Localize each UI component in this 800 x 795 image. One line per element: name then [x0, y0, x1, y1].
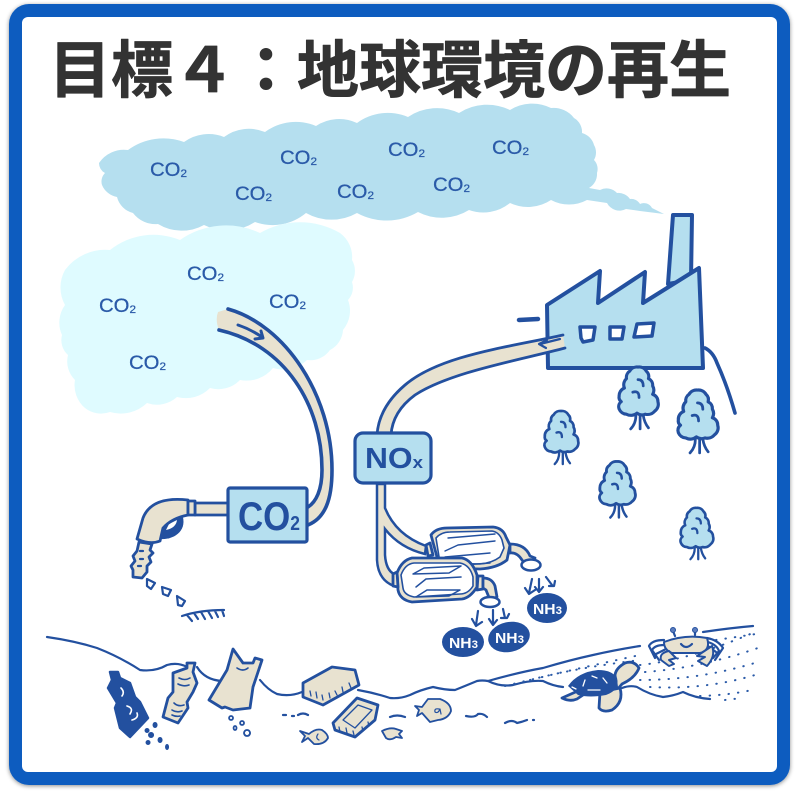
fiddler crab — [649, 628, 723, 666]
CO2 label: 2 — [310, 156, 317, 168]
beige plastic bottle — [163, 663, 197, 723]
CO2 label: 2 — [522, 146, 529, 158]
NOx label: NOx — [365, 443, 424, 475]
pipes to converters — [377, 484, 426, 586]
CO2 label: CO — [129, 353, 158, 374]
tree — [600, 461, 635, 518]
fish — [382, 728, 402, 739]
foam tray — [333, 698, 378, 737]
CO2 label: CO — [150, 160, 178, 181]
CO2 box label: CO — [238, 495, 298, 539]
hill line — [705, 348, 735, 413]
CO2 label: 2 — [418, 148, 425, 160]
water ripples — [283, 714, 534, 723]
NH3 label: NH3 — [449, 635, 478, 652]
CO2 box label: 2 — [290, 513, 300, 535]
CO2 label: 2 — [180, 168, 187, 180]
NOx pipe — [377, 335, 565, 435]
tree — [678, 390, 718, 453]
CO2 label: CO — [187, 264, 216, 285]
tree — [619, 367, 658, 429]
outlet pipe — [510, 544, 535, 566]
factory chimney and building — [519, 215, 735, 413]
crab claws — [661, 646, 713, 666]
NH3 label: NH3 — [495, 630, 524, 647]
CO2 label: CO — [492, 138, 520, 159]
CO2 label: CO — [235, 184, 264, 205]
NH3 arrows — [472, 577, 555, 626]
NH3 molecule — [527, 593, 567, 623]
icon: flow arrow — [238, 325, 263, 339]
CO2 label: 2 — [367, 190, 374, 202]
crab eyes — [673, 631, 695, 636]
CO2 label: 2 — [299, 300, 306, 312]
back catalytic converter — [426, 527, 540, 570]
icon: ground hatching — [182, 610, 224, 621]
front catalytic converter — [393, 558, 500, 607]
nozzle and hose — [131, 499, 228, 621]
microplastic fragments — [229, 716, 250, 736]
NH3 molecule — [442, 627, 484, 657]
CO2 label: 2 — [217, 272, 224, 284]
fish — [415, 699, 451, 722]
CO2 label: 2 — [129, 304, 136, 316]
outlet pipe — [483, 578, 497, 600]
tree — [680, 508, 713, 559]
CO2 label: CO — [337, 182, 366, 203]
icon: flow arrow — [539, 339, 560, 348]
shoreline — [47, 637, 710, 699]
NH3 molecule — [485, 618, 533, 656]
NH3 label: NH3 — [533, 601, 562, 618]
plastic bag — [209, 649, 262, 736]
CO2 label: CO — [280, 148, 308, 169]
beach sand dots — [505, 632, 758, 700]
icon: falling drops — [147, 579, 185, 606]
title: 目標４：地球環境の再生 — [49, 20, 731, 110]
upper CO2 cloud with factory smoke — [99, 104, 664, 231]
CO2 label: 2 — [463, 183, 470, 195]
sea turtle — [562, 662, 639, 711]
microplastic dots — [145, 722, 169, 750]
CO2 label: CO — [433, 175, 462, 196]
NOx box — [355, 433, 431, 483]
CO2 label: CO — [388, 140, 416, 161]
tree — [544, 411, 578, 464]
CO2 capture pipe — [217, 309, 332, 525]
dash mark — [519, 319, 538, 320]
fish — [300, 730, 328, 744]
CO2 label: CO — [269, 292, 298, 313]
CO2 label: 2 — [159, 361, 166, 373]
CO2 label: 2 — [265, 192, 272, 204]
beach edge — [488, 626, 753, 681]
CO2 storage box — [228, 488, 307, 542]
CO2 label: CO — [99, 296, 128, 317]
factory windows — [580, 323, 654, 342]
lower pale CO2 cloud — [59, 222, 355, 414]
dark plastic bottle — [108, 672, 148, 737]
foam tray lid — [303, 667, 359, 705]
